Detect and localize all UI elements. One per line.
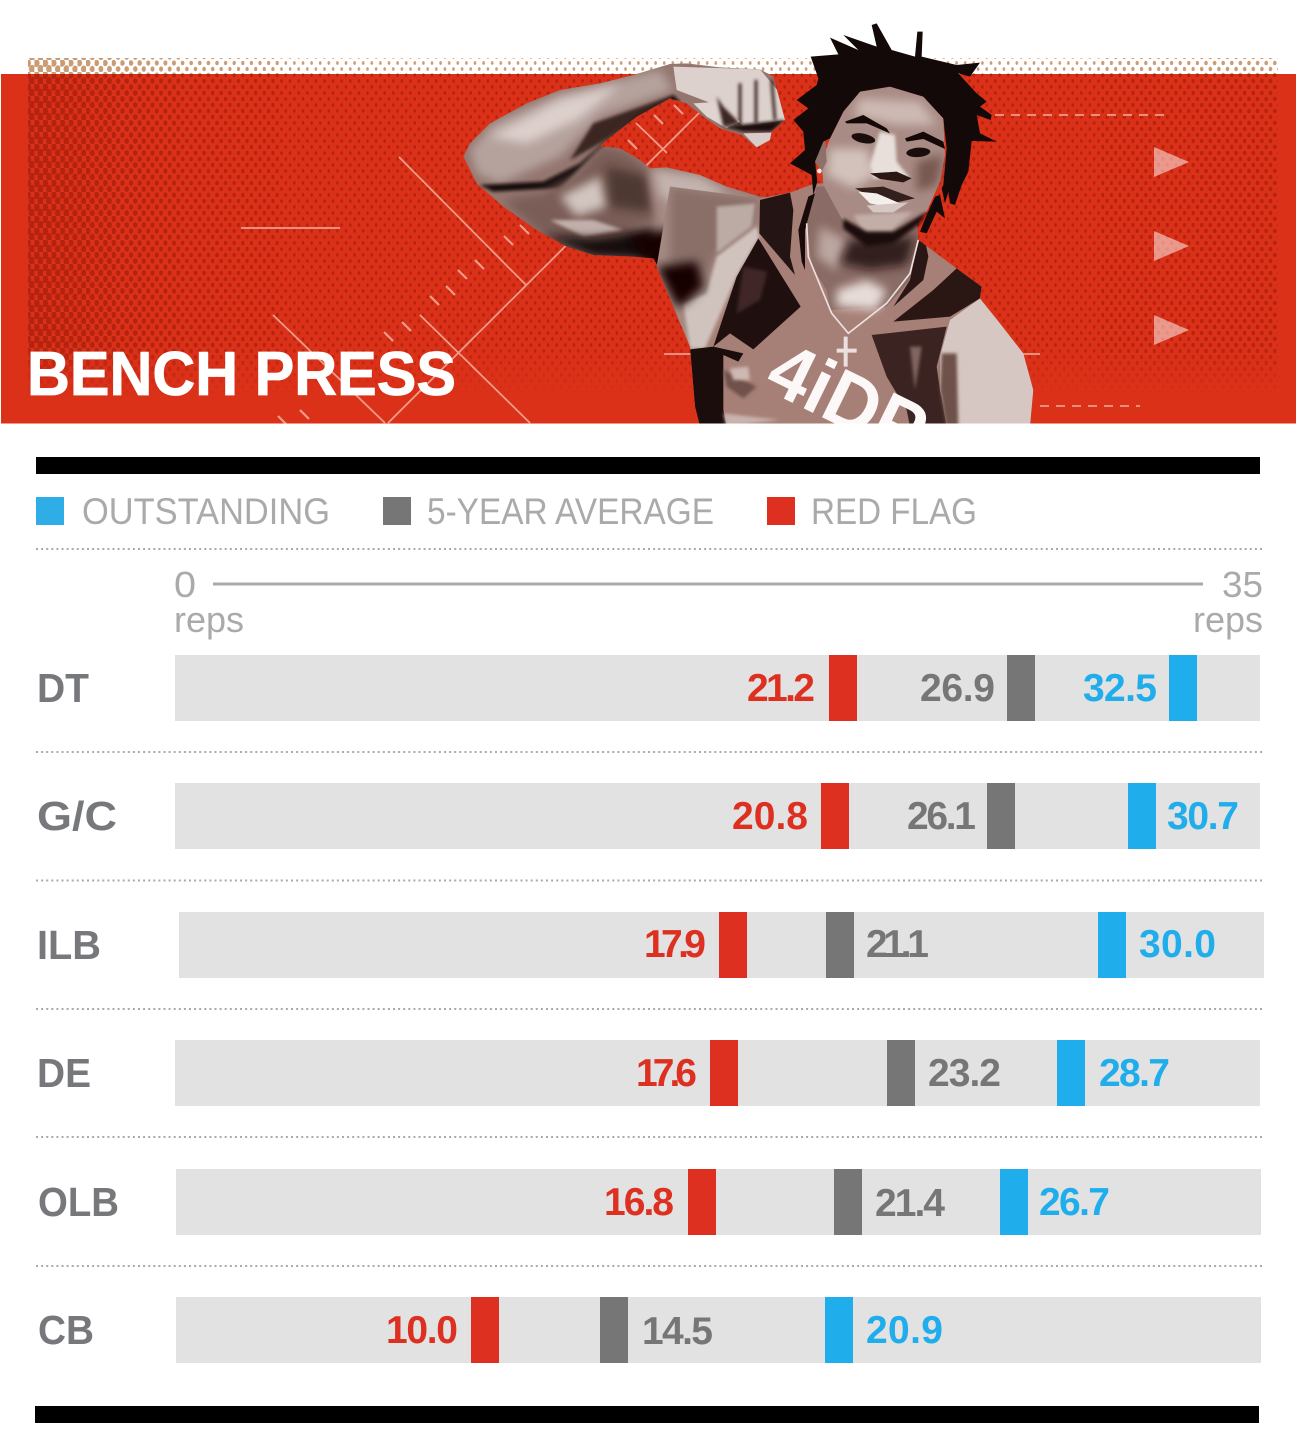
arm [464, 63, 785, 265]
row: CB: 10.0 [386, 1309, 458, 1352]
row: DT: DT [37, 665, 89, 711]
bottom rule [35, 1406, 1259, 1423]
row: OLB [38, 1169, 1261, 1235]
row: G/C: 20.8 [732, 795, 808, 838]
row: DE: 28.7 [1099, 1052, 1170, 1095]
legend: red flag: RED FLAG [811, 491, 977, 532]
axis scale: 35 [1222, 564, 1263, 605]
banner background [1, 74, 1296, 424]
row: DE: 17.6 [636, 1052, 697, 1095]
row: G/C [37, 783, 1260, 849]
field lines [241, 105, 1166, 424]
row: CB: 20.9 [866, 1309, 943, 1352]
axis scale: 0 [174, 564, 196, 605]
row: CB [38, 1297, 1261, 1363]
jersey lettering: 4iDP [755, 324, 941, 476]
facial features [815, 115, 945, 212]
row: OLB: 26.7 [1039, 1181, 1110, 1224]
row: DT [37, 655, 1260, 721]
banner [1, 23, 1296, 424]
row: ILB: 21.1 [866, 923, 929, 966]
necklace and cross [807, 223, 918, 367]
axis scale: reps [1193, 599, 1263, 640]
row: OLB: OLB [38, 1179, 119, 1225]
row: G/C: 26.1 [907, 795, 976, 838]
row: DT: 26.9 [920, 667, 995, 710]
row: ILB: 30.0 [1139, 923, 1216, 966]
halftone texture [28, 74, 1278, 399]
row: ILB: ILB [37, 922, 101, 968]
face [822, 87, 945, 242]
axis scale: reps [174, 599, 244, 640]
row: OLB: 21.4 [875, 1182, 945, 1225]
row: CB: CB [38, 1307, 94, 1353]
legend: 5-year average: 5-YEAR AVERAGE [427, 491, 714, 532]
row: DT: 21.2 [747, 667, 815, 710]
row: ILB: 17.9 [644, 923, 706, 966]
row: G/C: G/C [37, 793, 117, 839]
row: DE: DE [37, 1050, 91, 1096]
row: DE: 23.2 [928, 1052, 1001, 1095]
row: OLB: 16.8 [604, 1181, 674, 1224]
fist [673, 67, 785, 147]
row: ILB [37, 912, 1264, 978]
top rule [36, 457, 1260, 474]
row: CB: 14.5 [642, 1310, 713, 1353]
neck and chest skin [807, 187, 918, 310]
torso and shirt [653, 180, 1040, 427]
shirt dark panels [690, 193, 982, 427]
right arm [940, 298, 1033, 427]
row: DT: 32.5 [1083, 667, 1157, 710]
halftone strip [28, 58, 1278, 74]
arrows [1154, 147, 1189, 345]
title: BENCH PRESS [27, 340, 456, 409]
head [790, 23, 997, 247]
row: G/C: 30.7 [1167, 795, 1239, 838]
hair [790, 23, 997, 233]
row: DE [37, 1040, 1260, 1106]
legend [36, 491, 977, 532]
legend: outstanding: OUTSTANDING [82, 491, 330, 532]
axis scale [174, 564, 1263, 640]
athlete photo illustration [464, 23, 1034, 424]
